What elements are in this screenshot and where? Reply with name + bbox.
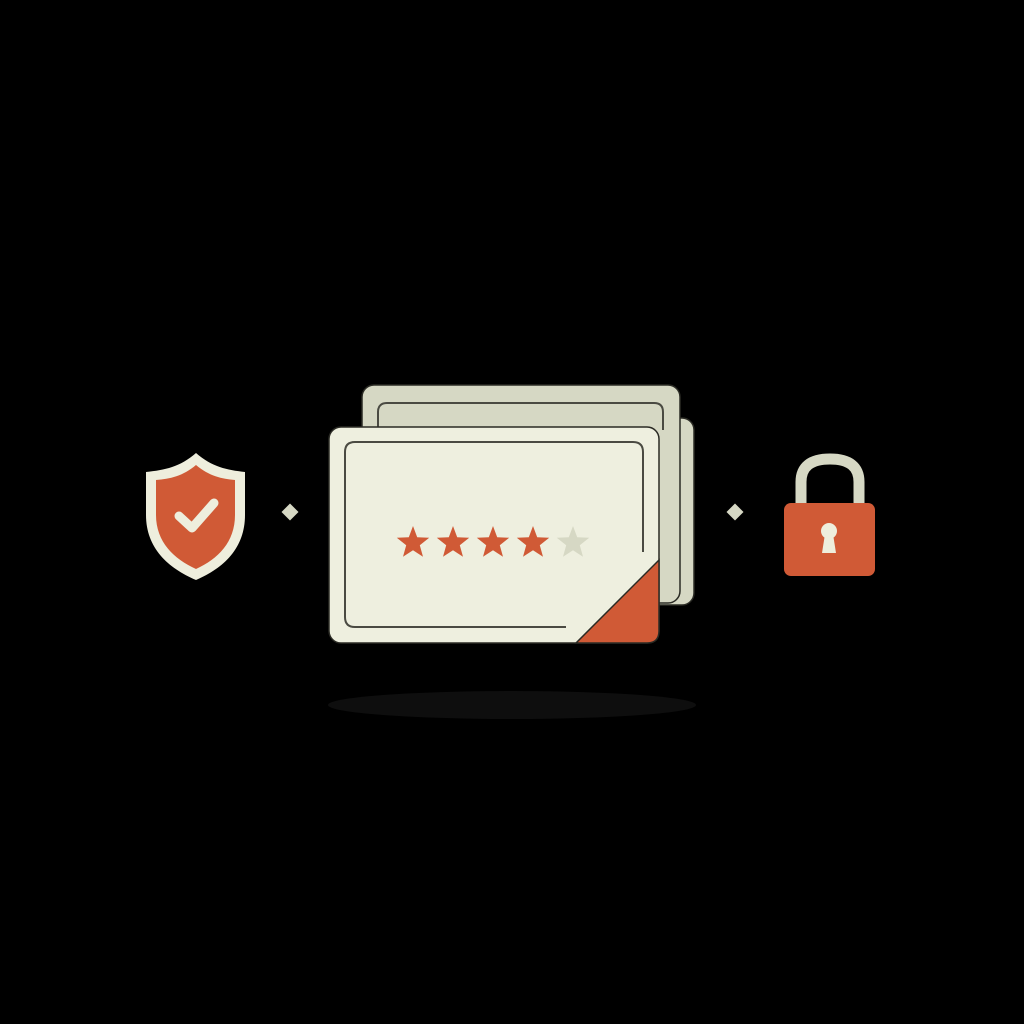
front card <box>329 427 659 643</box>
diamond right <box>727 504 743 520</box>
corner accent <box>576 560 659 643</box>
back card <box>362 385 680 603</box>
rating stars <box>397 526 589 557</box>
icon: shield with check <box>146 453 245 580</box>
icon: padlock <box>784 459 875 576</box>
back card right <box>600 418 694 605</box>
diamond left <box>282 504 298 520</box>
card stack <box>329 385 694 643</box>
shadow <box>328 691 696 719</box>
